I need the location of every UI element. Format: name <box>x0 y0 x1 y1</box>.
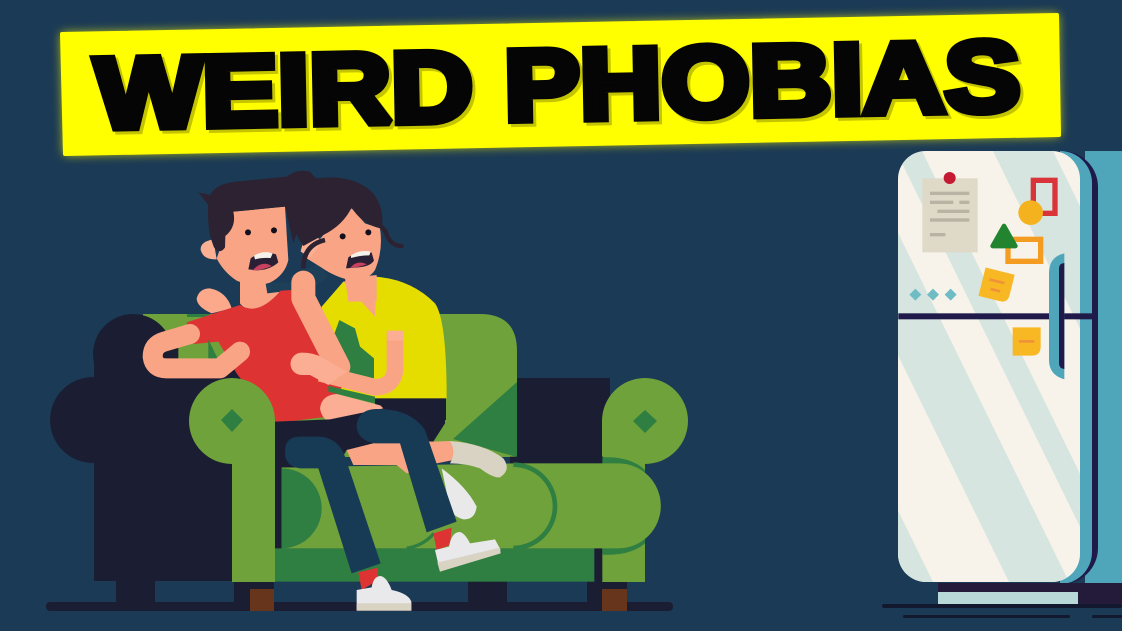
diamonds <box>909 289 957 301</box>
man left arm <box>153 334 240 368</box>
woman <box>290 172 447 420</box>
note with pin <box>922 172 978 252</box>
title: WEIRD PHOBIAS <box>94 20 1021 150</box>
man neck and collar gap <box>240 280 297 311</box>
man shirt <box>187 290 348 423</box>
door handle <box>1049 253 1064 379</box>
door divider <box>898 313 1093 319</box>
magnet: red frame <box>1033 180 1055 213</box>
title banner <box>61 14 1060 155</box>
man raised arm <box>313 303 335 353</box>
man shoes <box>357 532 501 611</box>
magnet: yellow circle <box>1018 200 1043 225</box>
sofa dark rear side <box>50 314 610 581</box>
man face <box>198 171 318 285</box>
man waving hand behind <box>197 288 232 313</box>
sofa seat and cushions <box>275 422 661 582</box>
woman head <box>290 172 402 302</box>
man socks <box>358 528 452 590</box>
title shadow: WEIRD PHOBIAS <box>97 23 1024 153</box>
fridge outer edge <box>1062 151 1098 584</box>
magnet: orange frame <box>1008 239 1041 261</box>
woman arm <box>320 332 395 387</box>
sofa feet <box>116 578 627 611</box>
sofa right arm <box>602 378 688 582</box>
man <box>153 171 348 423</box>
fridge door <box>898 151 1080 582</box>
man trousers <box>285 409 457 573</box>
magnet: green triangle <box>993 226 1015 246</box>
floor line under sofa <box>46 602 673 611</box>
fridge base and floor lines <box>882 583 1122 618</box>
legs and shoes <box>275 394 507 611</box>
fridge <box>882 151 1122 618</box>
banner plate <box>62 15 1059 154</box>
woman shirt <box>322 277 447 420</box>
banner glow <box>61 14 1060 155</box>
sofa left arm <box>189 378 275 582</box>
arms over the woman <box>291 283 403 403</box>
sticky note upper <box>978 267 1015 303</box>
sticky note lower <box>1013 327 1041 356</box>
sofa backrest <box>143 314 517 457</box>
fridge side <box>1085 151 1122 584</box>
fridge magnets and handle <box>898 172 1093 379</box>
sofa <box>46 314 688 611</box>
woman's legs <box>275 394 507 519</box>
